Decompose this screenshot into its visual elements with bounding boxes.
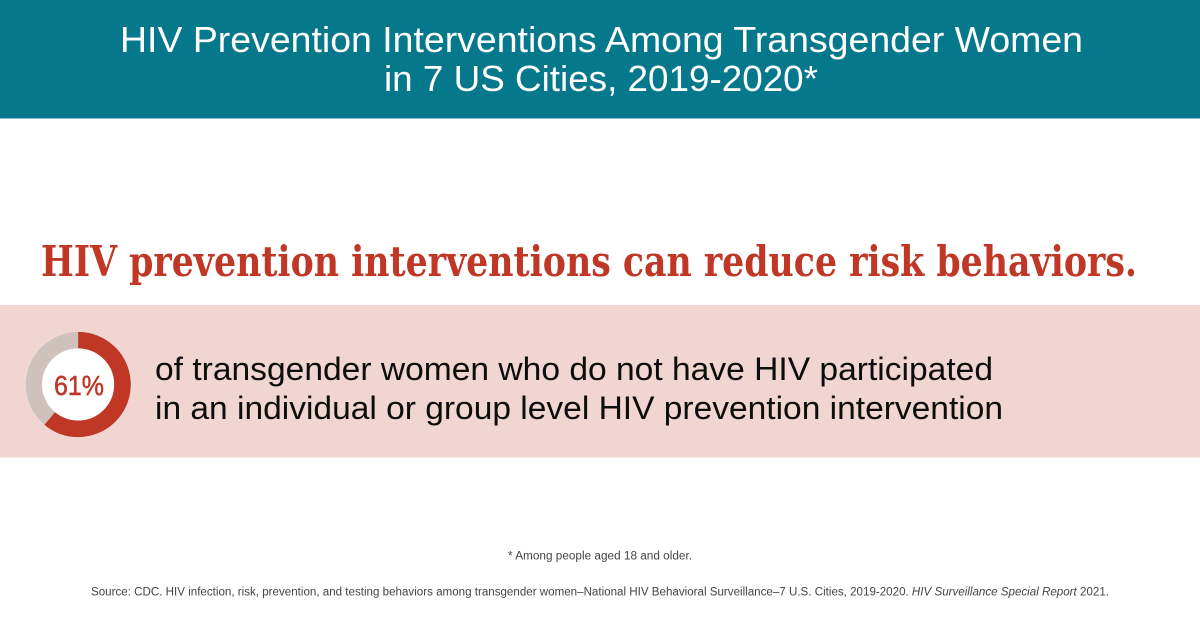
footnote: * Among people aged 18 and older. xyxy=(508,550,692,562)
header banner xyxy=(0,0,1200,118)
statistic description: of transgender women who do not have HIV participated xyxy=(155,351,993,387)
donut value: 61% xyxy=(54,370,104,401)
title: in 7 US Cities, 2019-2020* xyxy=(384,58,818,99)
statistic description xyxy=(155,351,1003,426)
title xyxy=(120,19,1083,99)
panel: statistic band xyxy=(0,305,1200,458)
title: HIV Prevention Interventions Among Transgender Women xyxy=(120,19,1083,60)
source citation: Source: CDC. HIV infection, risk, prevention, and testing behaviors among transgender women–National HIV Behavioral Surveillance–7 U.S. Cities, 2019-2020. HIV Surveillance Special Report 2021. xyxy=(91,586,1109,598)
donut chart: 61% xyxy=(25,332,131,438)
statistic description: in an individual or group level HIV prevention intervention xyxy=(155,390,1003,426)
